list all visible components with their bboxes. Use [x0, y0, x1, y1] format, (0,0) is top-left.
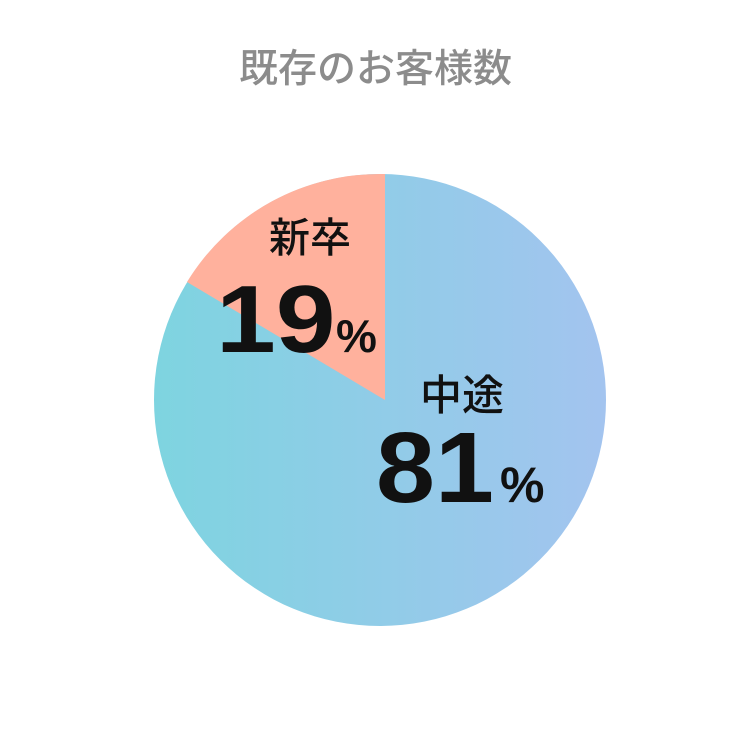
- label: 新卒 19%: 新卒: [269, 204, 351, 264]
- label: 中途 81%: 81: [376, 412, 494, 523]
- slice: 中途 81%: [154, 174, 606, 626]
- label: 中途 81%: %: [500, 457, 544, 513]
- label: 新卒 19%: [216, 204, 377, 373]
- slice: 新卒 19%: [187, 174, 385, 400]
- label: 新卒 19%: %: [336, 310, 377, 362]
- label: 中途 81%: [376, 362, 544, 523]
- label: 新卒 19%: 19: [216, 265, 336, 373]
- title: 既存のお客様数: [239, 38, 512, 94]
- label: 中途 81%: 中途: [420, 362, 504, 423]
